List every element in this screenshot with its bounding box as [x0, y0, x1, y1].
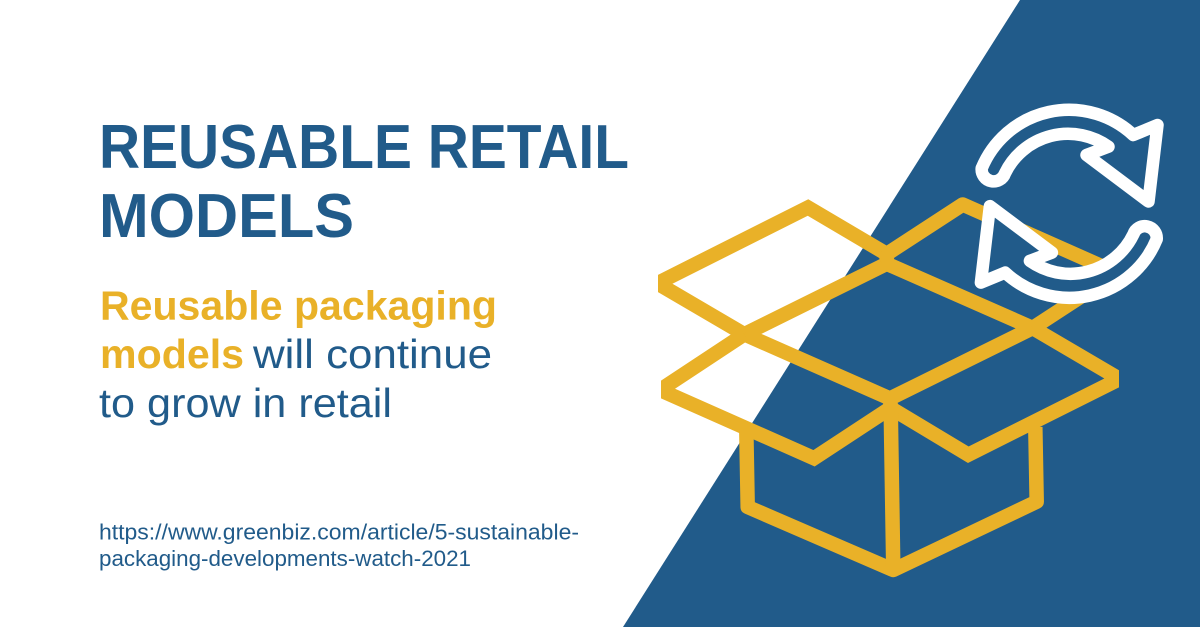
subtitle: models	[100, 331, 244, 377]
subtitle: to grow in retail	[99, 380, 392, 426]
subtitle: Reusable packaging	[100, 282, 497, 328]
box rim	[744, 264, 1033, 398]
rear flap junction	[879, 250, 894, 264]
icon: recycling arrows	[981, 110, 1158, 298]
front edge	[891, 408, 893, 570]
title: MODELS	[99, 182, 354, 251]
box body	[746, 427, 1037, 570]
top right flap	[887, 204, 1117, 328]
arrow: top	[982, 110, 1158, 202]
arrow: bottom	[981, 206, 1157, 298]
source url: https://www.greenbiz.com/article/5-sustainable-	[99, 520, 579, 544]
source url: packaging-developments-watch-2021	[99, 546, 471, 571]
bottom left flap	[660, 334, 890, 458]
title	[99, 113, 629, 251]
subtitle: will continue	[252, 331, 492, 377]
title: REUSABLE RETAIL	[99, 113, 629, 182]
source url	[99, 520, 579, 571]
bottom right flap	[890, 328, 1120, 455]
icon: open cardboard box	[657, 204, 1120, 570]
front flap junction	[883, 398, 898, 412]
subtitle	[99, 282, 497, 426]
blue diagonal panel	[623, 0, 1200, 627]
top left flap	[657, 208, 887, 334]
